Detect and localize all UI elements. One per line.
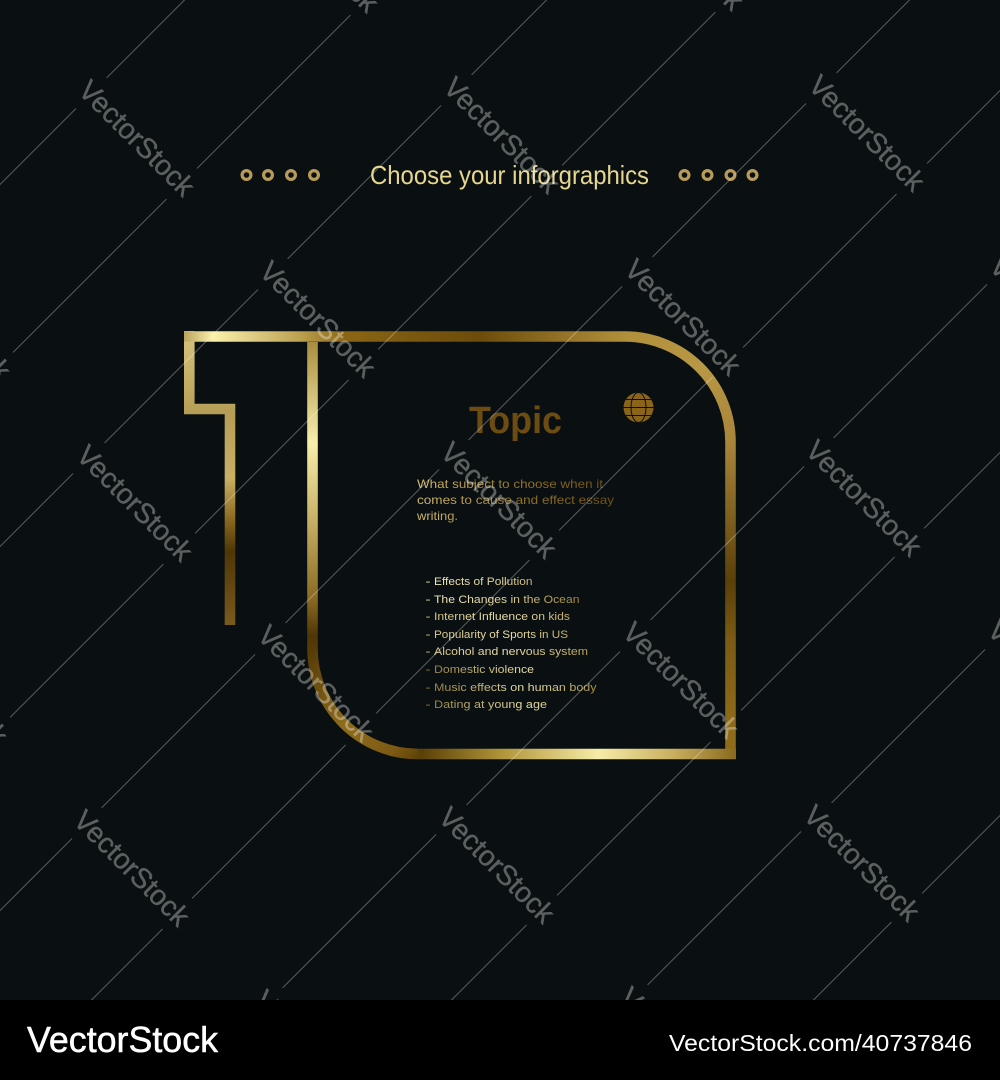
watermark pattern: VectorStock (434, 436, 563, 566)
numeral one stroke (189, 331, 230, 625)
intro paragraph (416, 478, 614, 523)
watermark pattern: VectorStock (67, 804, 196, 934)
topic list: Effects of Pollution (434, 576, 532, 588)
right dot row (680, 171, 757, 179)
watermark pattern: VectorStock (797, 799, 926, 929)
intro paragraph: writing. (416, 510, 458, 523)
topic list: - (426, 682, 431, 694)
watermark pattern: VectorStock (618, 253, 747, 383)
watermark pattern: VectorStock (799, 434, 928, 564)
topic list: Domestic violence (434, 664, 534, 676)
topic list: - (426, 629, 431, 641)
topic list: Internet Influence on kids (434, 611, 570, 623)
watermark pattern: VectorStock (432, 801, 561, 931)
topic list: Music effects on human body (434, 682, 597, 694)
right edge (725, 442, 736, 759)
bottom edge (418, 749, 736, 759)
watermark pattern: VectorStock (253, 255, 382, 385)
footer image id: VectorStock.com/40737846 (669, 1030, 972, 1056)
footer logo: VectorStock (27, 1019, 219, 1060)
topic list: The Changes in the Ocean (434, 594, 580, 606)
topic list: Popularity of Sports in US (434, 629, 568, 641)
topic heading: Topic (469, 400, 562, 442)
top right corner (625, 336, 730, 442)
watermark pattern: VectorStock (802, 69, 931, 199)
topic list: - (426, 699, 431, 711)
header: dots and title (242, 160, 757, 190)
icon: globe (624, 392, 654, 422)
watermark pattern: VectorStock (437, 71, 566, 201)
title: Choose your inforgraphics (370, 160, 649, 190)
footer band (0, 1000, 1000, 1080)
topic list: - (426, 576, 431, 588)
watermark pattern: VectorStock (70, 439, 199, 569)
intro paragraph: What subject to choose when it (417, 478, 604, 491)
left dot row (242, 171, 318, 179)
watermark pattern: VectorStock (616, 616, 745, 746)
intro paragraph: comes to cause and effect essay (417, 494, 614, 507)
topic list: Dating at young age (434, 699, 547, 711)
topic list: - (426, 664, 431, 676)
topic list: - (426, 611, 431, 623)
topic list: Alcohol and nervous system (434, 646, 588, 658)
inner vertical stem (307, 342, 318, 648)
gold number one frame (184, 331, 736, 759)
topic list (426, 576, 597, 711)
topic list: - (426, 646, 431, 658)
watermark pattern: VectorStock (72, 74, 201, 204)
watermark pattern: VectorStock (251, 619, 380, 749)
bottom left corner (312, 648, 418, 754)
topic list: - (426, 594, 431, 606)
top edge (184, 331, 625, 342)
